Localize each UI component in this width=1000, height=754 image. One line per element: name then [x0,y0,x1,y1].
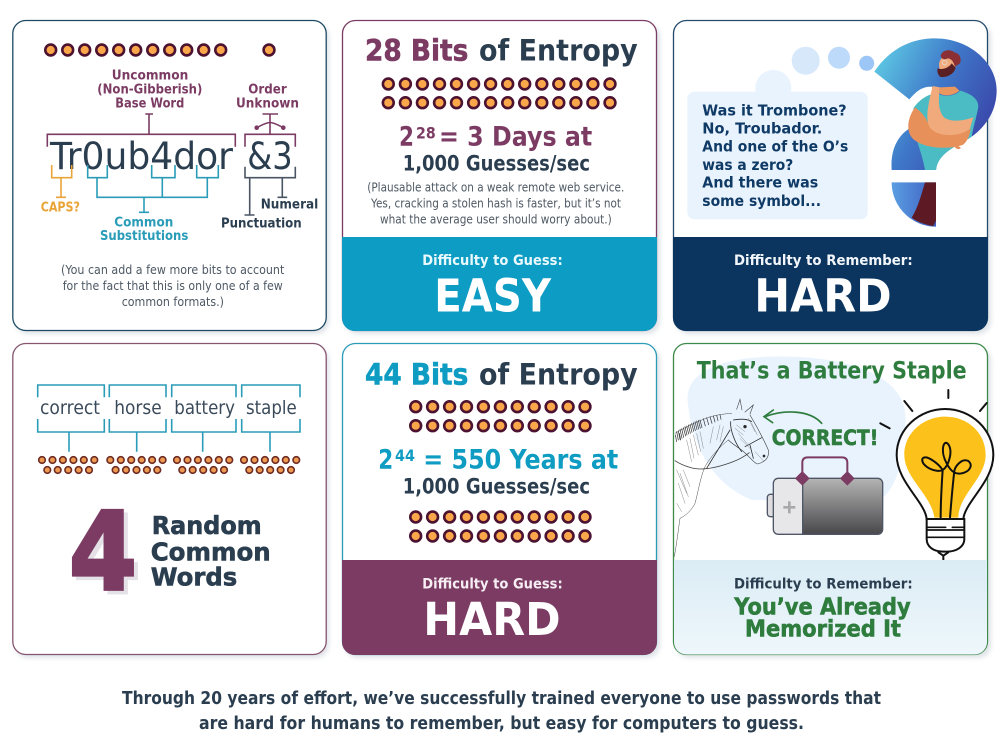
passphrase words: correct [40,397,100,419]
note: for the fact that this is only one of a few [63,279,283,293]
entropy dots upper [410,401,590,431]
footer caption: Through 20 years of effort, we’ve successfully trained everyone to use passwords that [122,689,881,709]
speech box [687,92,868,219]
icon: horse sketch [674,399,769,557]
bracket: punctuation and numeral [244,167,295,215]
background blob [687,357,906,500]
bracket: caps [52,165,72,197]
passphrase words: staple [246,397,297,419]
band: difficulty to guess hard [342,560,657,655]
panel: 28 bits of entropy [342,20,657,331]
calculation: 28 [416,123,436,142]
calculation: 44 [395,446,415,465]
panel: password anatomy [13,20,326,330]
heading: 44 Bits [365,357,468,391]
note: common formats.) [122,295,224,309]
icon: question mark with thinking man [874,38,997,227]
word brackets [38,385,300,452]
label: base word: Base Word [115,96,184,111]
note [367,181,624,227]
band: difficulty to guess hard: Difficulty to Guess: [422,576,563,592]
heading: of Entropy [479,357,638,391]
label: order unknown: Order [248,82,287,97]
note: (You can add a few more bits to account [61,263,285,277]
passphrase words: battery [174,397,235,419]
heading: of Entropy [479,34,638,68]
band: difficulty to remember memorized [674,560,987,654]
panel: four random words [13,344,326,654]
label: common substitutions: Common [114,216,173,231]
random common words label: Words [151,563,237,592]
calculation: = 3 Days at [439,122,592,153]
guess rate: 1,000 Guesses/sec [403,152,590,176]
icon: battery [767,457,883,534]
bracket: order unknown [245,114,295,147]
calculation: = 550 Years at [423,444,618,475]
big number 4: 4 [73,494,141,619]
arrow [764,410,822,423]
band: difficulty to guess easy [342,237,657,331]
panel: 44 bits of entropy [342,344,657,655]
icon: light bulb [880,390,993,560]
small entropy dots [39,457,300,473]
speech box: Was it Trombone? [702,102,847,120]
heading: 28 Bits [365,34,468,68]
speech box: And one of the O’s [702,138,848,156]
band: difficulty to remember memorized: Memorized It [745,617,901,643]
label: caps: CAPS? [41,201,80,216]
random common words label: Common [151,537,271,566]
band: difficulty to guess easy: Difficulty to Guess: [422,253,563,269]
note: Yes, cracking a stolen hash is faster, but it’s not [370,197,621,211]
random common words label: Random [152,511,262,540]
band: difficulty to guess hard: HARD [423,593,561,646]
passphrase words [40,397,297,419]
label: order unknown: Unknown [236,96,299,111]
bracket: common substitutions [88,165,218,212]
band: difficulty to remember memorized: Difficulty to Remember: [734,576,913,592]
big number 4: 4 [69,490,137,616]
label: base word: (Non-Gibberish) [97,82,202,97]
band: difficulty to remember hard: Difficulty to Remember: [734,253,913,269]
label: base word: Uncommon [112,68,188,83]
entropy dots grid [383,79,615,108]
bracket: base word [47,114,235,147]
band: difficulty to guess easy: EASY [434,270,552,323]
calculation: 2 [399,122,414,153]
note: what the average user should worry about.) [380,213,612,227]
speech box: was a zero? [702,156,793,174]
speech box: No, Troubador. [702,120,822,138]
speech box: some symbol... [702,192,821,210]
label: common substitutions [100,216,189,244]
calculation: 2 [378,444,393,475]
random common words label [151,511,271,592]
panel: hard to remember [673,20,997,331]
note: (Plausable attack on a weak remote web service. [367,181,624,195]
label: order unknown [236,82,299,111]
note [61,263,285,309]
label: common substitutions: Substitutions [100,229,189,244]
passphrase words: horse [114,397,162,419]
thought bubble circles [755,47,874,106]
label: numeral: Numeral [261,197,318,212]
footer caption [122,689,881,734]
entropy dots lower [410,512,590,541]
panel: battery staple [674,344,993,654]
password text: Tr0ub4dor [49,135,234,178]
footer caption: are hard for humans to remember, but easy for computers to guess. [199,714,804,734]
heading [365,357,638,391]
guess rate: 1,000 Guesses/sec [403,474,590,498]
band: difficulty to remember memorized: You’ve Already [733,594,911,620]
speech box: And there was [702,174,818,192]
label: punctuation: Punctuation [221,217,302,232]
band: difficulty to remember hard: HARD [754,270,892,323]
band: difficulty to remember hard [673,237,988,331]
entropy dots row [45,45,274,55]
password text: &3 [247,135,293,178]
heading [365,34,638,68]
label: base word [97,68,202,111]
correct label: CORRECT! [772,426,878,450]
